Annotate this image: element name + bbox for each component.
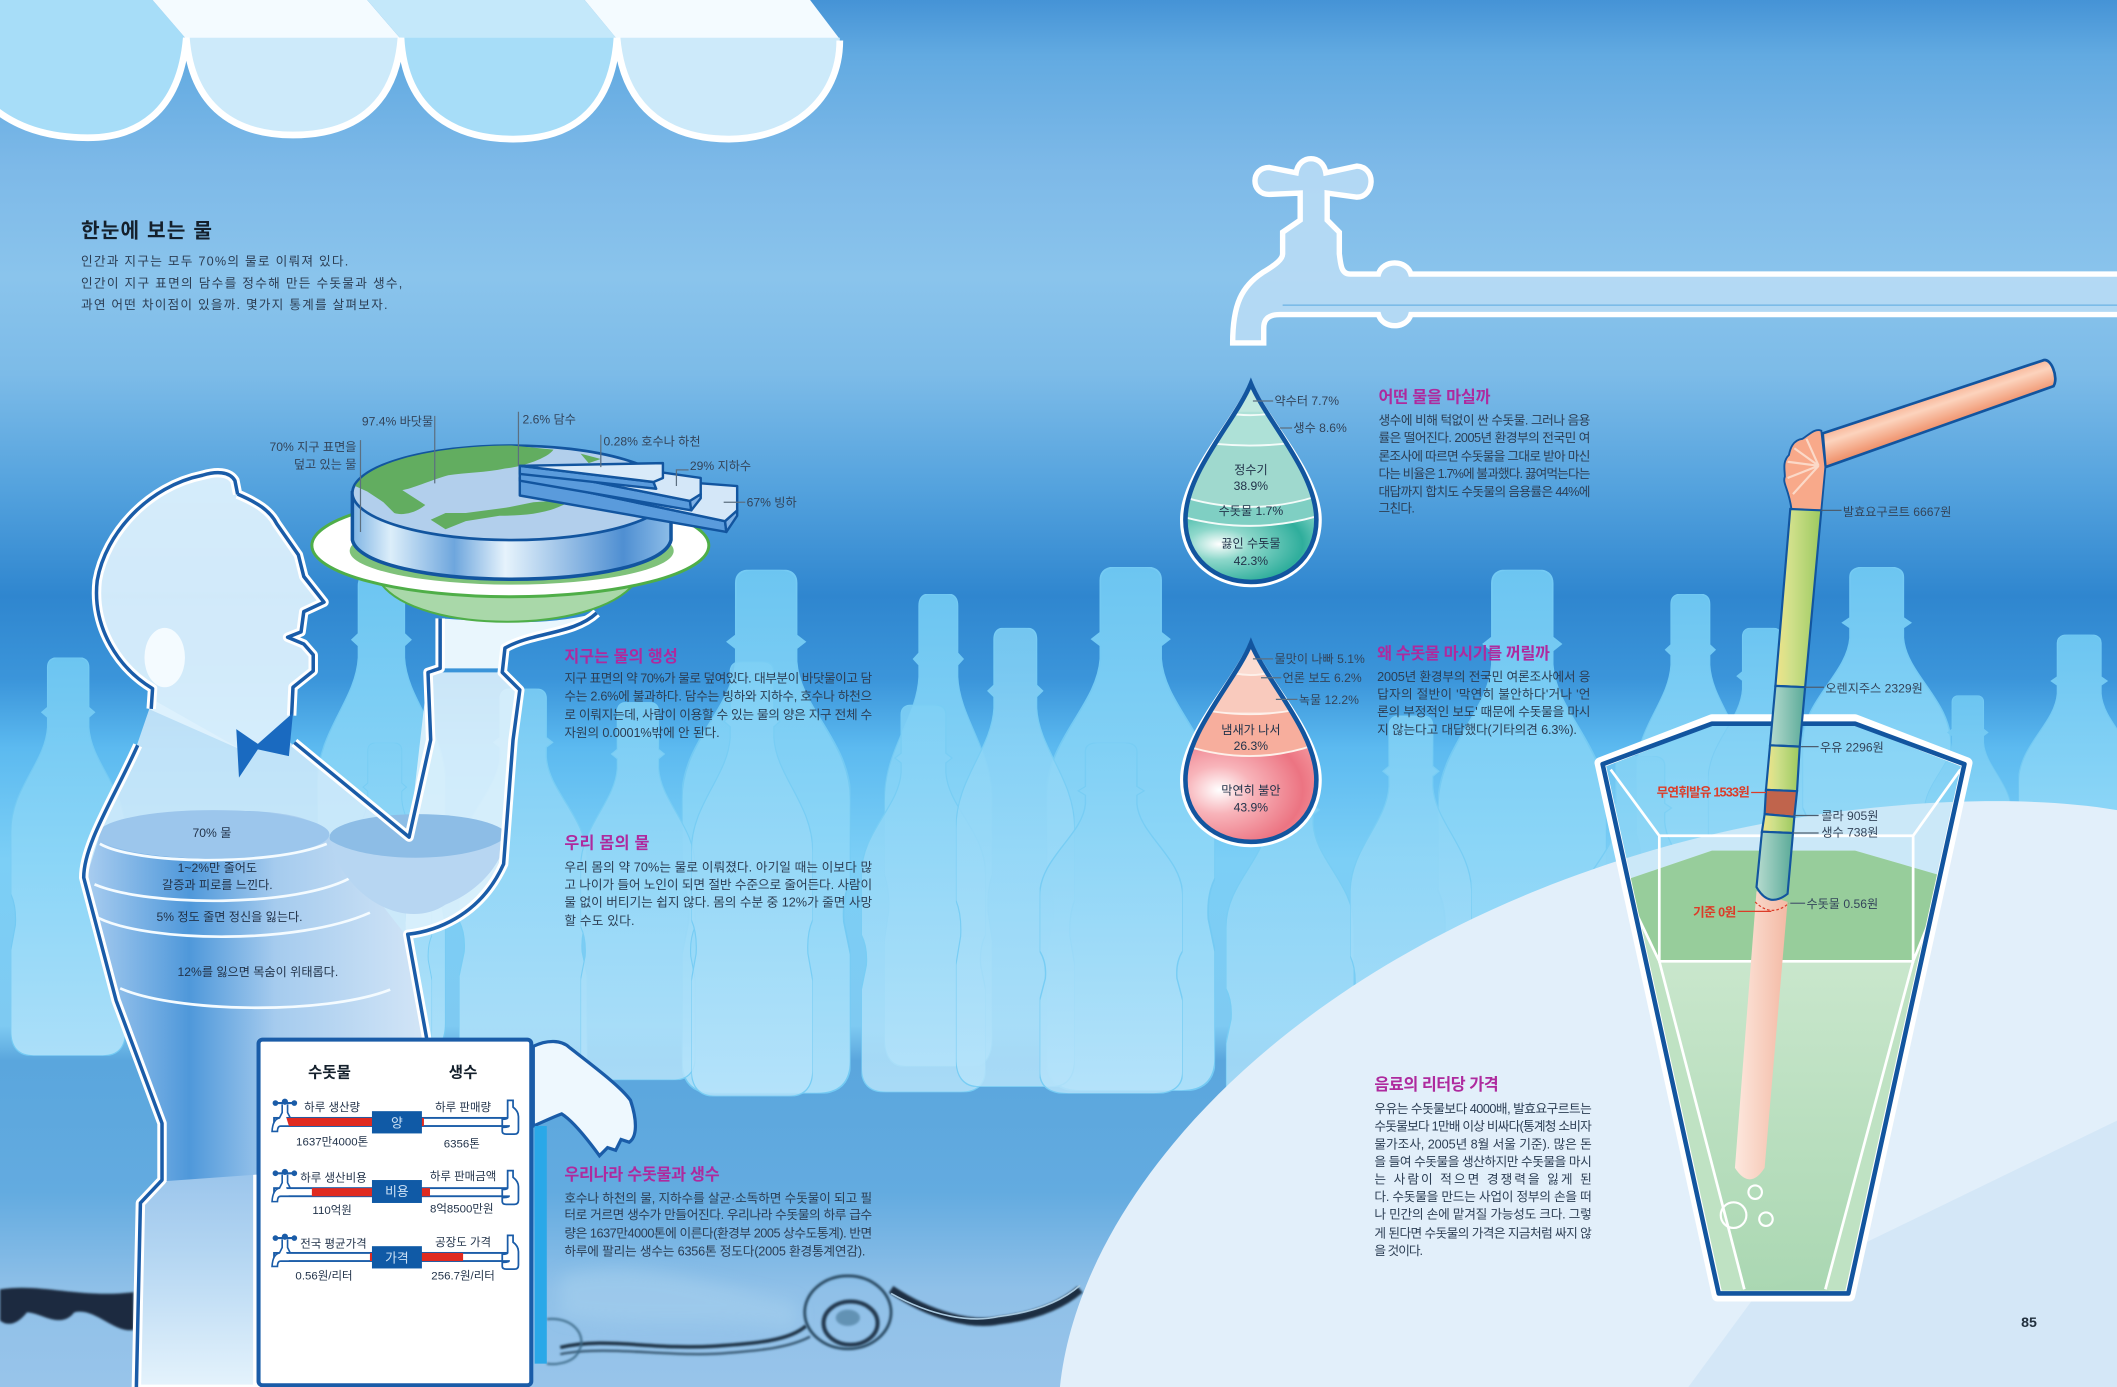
pie labels: 97.4% 바닷물 <box>362 414 433 428</box>
title block: 과연 어떤 차이점이 있을까. 몇가지 통계를 살펴보자. <box>81 298 387 312</box>
text: water in our body: 할 수도 있다. <box>564 914 635 928</box>
world map land <box>355 446 601 529</box>
straw price labels: 기준 0원 <box>1693 906 1736 920</box>
text: which water to drink: 률은 떨어진다. 2005년 환경부의 전국민 여 <box>1378 431 1590 445</box>
text: which water to drink: 어떤 물을 마실까 <box>1378 388 1491 406</box>
row: cost: 110억원 <box>312 1203 352 1217</box>
text: planet of water <box>564 647 872 740</box>
man: raised hand <box>440 613 597 668</box>
drop labels: 수돗물 1.7% <box>1219 504 1283 518</box>
title block <box>81 220 402 312</box>
text: price per liter: 을 들여 수돗물을 생산하지만 수돗물을 마시 <box>1374 1155 1592 1169</box>
drop leaders <box>1253 401 1292 428</box>
pie cylinder side <box>352 493 671 579</box>
text: which water to drink <box>1378 388 1591 515</box>
man: ear <box>144 628 185 687</box>
drop outline <box>1180 378 1322 587</box>
drop outline <box>1180 638 1322 847</box>
text: why avoid tap water: 답자의 절반이 '막연히 불안하다'거나 '언 <box>1377 688 1590 702</box>
big faucet with pipe <box>1233 159 2117 343</box>
drop chart: what water people drink <box>1175 378 1347 589</box>
drop border <box>1185 383 1316 582</box>
row: quantity: 1637만4000톤 <box>296 1136 368 1149</box>
text: planet of water: 지구는 물의 행성 <box>564 647 678 666</box>
straw price labels: 수돗물 0.56원 <box>1806 897 1878 911</box>
drop border <box>1185 643 1316 842</box>
row: cost: 8억8500만원 <box>430 1201 494 1215</box>
text: why avoid tap water: 지 않는다고 대답했다(기타의견 6.3%). <box>1377 722 1577 737</box>
panel column headers: 수돗물 <box>308 1063 351 1081</box>
text: why avoid tap water: 왜 수돗물 마시기를 꺼릴까 <box>1377 645 1550 663</box>
text: tap water and bottled water: 호수나 하천의 물, 지하수를 살균·소독하면 수돗물이 되고 필 <box>564 1191 872 1205</box>
row: quantity: 하루 생산량 <box>304 1100 361 1114</box>
row: price: 256.7원/리터 <box>431 1268 495 1282</box>
straw price labels: 우유 2296원 <box>1820 740 1884 754</box>
man: legs <box>136 1123 257 1387</box>
text: price per liter: 게 된다면 수돗물의 가격은 지금처럼 싸지 않 <box>1374 1226 1592 1240</box>
drop leaders <box>1253 659 1297 699</box>
pie labels: 0.28% 호수나 하천 <box>604 434 701 449</box>
man: lower hand <box>533 1041 635 1156</box>
liquid body <box>1632 851 1935 1291</box>
pie labels: 67% 빙하 <box>747 495 797 509</box>
man: body water labels: 갈증과 피로를 느낀다. <box>162 878 273 892</box>
drop labels: 막연히 불안 <box>1221 784 1281 798</box>
man: body water labels: 70% 물 <box>193 826 231 840</box>
straw bend ruffle <box>1784 430 1825 510</box>
text: price per liter: 수돗물보다 1만배 이상 비싸다(통계청 소비자 <box>1374 1120 1592 1134</box>
row: price: 0.56원/리터 <box>295 1268 353 1282</box>
text: water in our body: 우리 몸의 약 70%는 물로 이뤄졌다. 아기일 때는 이보다 많 <box>564 861 872 875</box>
man: body water labels: 5% 정도 줄면 정신을 잃는다. <box>156 910 303 924</box>
liquid lower darker facet <box>1642 928 1743 1291</box>
text: price per liter: 물가조사, 2005년 8월 서울 기준). 많은 돈 <box>1374 1137 1592 1151</box>
drop labels: 정수기 <box>1234 463 1268 477</box>
row: cost: 하루 판매금액 <box>430 1169 496 1183</box>
drop labels <box>1219 393 1347 568</box>
row: price: 공장도 가격 <box>435 1235 491 1249</box>
page number: 85 <box>2021 1315 2037 1331</box>
plate rim <box>312 494 709 597</box>
text: price per liter: 는 사람이 적으면 경쟁력을 잃게 된 <box>1374 1172 1592 1186</box>
drop labels: 끓인 수돗물 <box>1221 536 1281 550</box>
man: jacket torso <box>84 699 429 1181</box>
text: price per liter: 다. 수돗물을 만드는 사업이 정부의 손을 떠 <box>1374 1190 1592 1204</box>
awning top stripes <box>0 0 840 39</box>
straw orange arm <box>1823 360 2055 467</box>
text: which water to drink: 론조사에 따르면 수돗물을 그대로 받아 마신 <box>1378 449 1590 463</box>
text: planet of water: 로 이뤄지는데, 사람이 이용할 수 있는 물의 양은 지구 전체 수 <box>564 708 872 722</box>
glass interior tint <box>1600 720 1967 1296</box>
row: quantity: 6356톤 <box>444 1138 480 1151</box>
pie labels: 29% 지하수 <box>690 459 751 473</box>
row: cost: 하루 생산비용 <box>300 1170 367 1184</box>
pie labels: 2.6% 담수 <box>522 412 576 426</box>
pie top ocean <box>352 446 671 540</box>
row: price <box>272 1234 518 1282</box>
pie labels <box>270 412 797 509</box>
text: tap water and bottled water: 량은 1637만4000톤에 이른다(환경부 2005 상수도통계). 반면 <box>564 1226 872 1240</box>
straw price labels: 오렌지주스 2329원 <box>1825 682 1923 696</box>
drop labels <box>1221 652 1365 814</box>
text: tap water and bottled water: 우리나라 수돗물과 생수 <box>564 1166 720 1184</box>
glass outer outline <box>1600 720 1967 1296</box>
plate under-bowl <box>381 583 635 622</box>
text: tap water and bottled water: 터로 거르면 생수가 만들어진다. 우리나라 수돗물의 하루 급수 <box>564 1208 872 1222</box>
row: quantity <box>272 1099 518 1151</box>
wedge: lakes and rivers 0.28% <box>520 463 663 489</box>
plate and pie chart <box>270 412 797 622</box>
glass inner facets <box>1611 770 1960 1289</box>
panel column headers: 생수 <box>449 1063 477 1081</box>
drop labels: 녹물 12.2% <box>1299 693 1359 707</box>
drop bands <box>1188 649 1314 840</box>
bubbles <box>1721 1185 1773 1228</box>
drop labels: 43.9% <box>1234 800 1268 814</box>
straw price segments <box>1757 509 1821 900</box>
water surface waves and ripple <box>0 1269 1080 1364</box>
panel column headers <box>308 1063 477 1081</box>
straw price labels <box>1657 505 1952 920</box>
bright vertical water strip <box>535 1126 547 1364</box>
man: raised sleeve and arm bowl <box>405 672 520 934</box>
text: why avoid tap water <box>1377 645 1590 737</box>
text: planet of water: 지구 표면의 약 70%가 물로 덮여있다. 대부분이 바닷물이고 담 <box>564 671 872 685</box>
pie labels: 70% 지구 표면을 <box>270 440 356 454</box>
man: bow tie <box>236 713 293 778</box>
row: cost <box>272 1169 518 1217</box>
drop labels: 냄새가 나서 <box>1221 723 1281 737</box>
bottle silhouettes front row <box>338 628 1708 1148</box>
text: why avoid tap water: 2005년 환경부의 전국민 여론조사에서 응 <box>1377 670 1590 684</box>
title block: 인간이 지구 표면의 담수를 정수해 만든 수돗물과 생수, <box>81 277 402 291</box>
drop labels: 42.3% <box>1234 554 1268 568</box>
drop labels: 언론 보도 6.2% <box>1283 671 1362 685</box>
straw price labels: 생수 738원 <box>1821 825 1878 839</box>
man: body water labels: 1~2%만 줄어도 <box>178 861 257 875</box>
text: water in our body: 고 나이가 들어 노인이 되면 절반 수준으로 줄어든다. 사람이 <box>564 878 872 892</box>
straw price labels: 발효요구르트 6667원 <box>1843 505 1952 519</box>
liquid surface <box>1630 850 1937 960</box>
text: price per liter: 을 것이다. <box>1374 1244 1423 1258</box>
text: water in our body: 우리 몸의 물 <box>564 835 650 853</box>
man: body water labels <box>156 826 338 979</box>
wedge: groundwater 29% <box>520 467 701 510</box>
pie labels: 덮고 있는 물 <box>294 457 356 471</box>
pie wedges <box>520 463 737 532</box>
row: cost: 비용 <box>385 1184 409 1199</box>
drop bands <box>1188 389 1314 580</box>
text: why avoid tap water: 론의 부정적인 보도' 때문에 수돗물을 마시 <box>1377 705 1590 719</box>
glass with liquid <box>1593 720 1971 1296</box>
straw price labels: 콜라 905원 <box>1821 809 1878 823</box>
text: tap water and bottled water: 하루에 팔리는 생수는 6356톤 정도다(2005 환경통계연감). <box>564 1245 865 1259</box>
awning <box>0 0 840 139</box>
comparison panel: tap vs bottled <box>259 1040 531 1385</box>
pie leader lines <box>360 412 745 532</box>
pale table curve at lower right <box>1060 801 2117 1387</box>
wedge: glaciers 67% <box>520 478 737 532</box>
bottle silhouettes back row <box>11 567 2117 1110</box>
row: quantity: 양 <box>391 1115 403 1130</box>
liquid clipped to glass <box>1630 850 1937 1291</box>
drop chart: why avoid tap water <box>1175 638 1365 849</box>
man: water surface ellipse and level lines <box>95 810 390 1008</box>
straw leader lines <box>1738 510 1842 911</box>
text: planet of water: 수는 2.6%에 불과하다. 담수는 빙하와 지하수, 호수나 하천으 <box>564 690 872 704</box>
text: water in our body: 물 없이 버티기는 쉽지 않다. 몸의 수분 중 12%가 줄면 사망 <box>564 896 872 910</box>
drop labels: 생수 8.6% <box>1293 421 1347 435</box>
man: head <box>97 473 324 751</box>
man: waiter figure <box>84 473 635 1387</box>
drop labels: 38.9% <box>1234 479 1268 493</box>
text: which water to drink: 다는 비율은 1.7%에 불과했다. 끓여먹는다는 <box>1378 466 1591 481</box>
man: body water level <box>86 811 429 1181</box>
man: body water labels: 12%를 잃으면 목숨이 위태롭다. <box>178 965 338 979</box>
text: which water to drink: 대답까지 합치도 수돗물의 음용률은 44%에 <box>1378 485 1590 499</box>
text: planet of water: 자원의 0.0001%밖에 안 된다. <box>564 726 720 740</box>
plate inner green ring <box>350 517 674 585</box>
title block: 인간과 지구는 모두 70%의 물로 이뤄져 있다. <box>81 254 348 268</box>
text: tap water and bottled water <box>564 1166 872 1259</box>
straw lower pink section <box>1735 891 1788 1179</box>
text: price per liter <box>1374 1076 1592 1258</box>
row: price: 전국 평균가격 <box>300 1237 367 1251</box>
text: which water to drink: 생수에 비해 턱없이 싼 수돗물. 그러나 음용 <box>1378 414 1590 428</box>
text: water in our body <box>564 835 872 928</box>
title block: 한눈에 보는 물 <box>81 220 212 243</box>
row: price: 가격 <box>385 1250 409 1265</box>
text: price per liter: 음료의 리터당 가격 <box>1374 1076 1499 1094</box>
drop labels: 약수터 7.7% <box>1275 393 1339 408</box>
glass shadow on table <box>1688 1121 2117 1387</box>
text: which water to drink: 그친다. <box>1378 501 1415 515</box>
row: quantity: 하루 판매량 <box>435 1100 492 1114</box>
straw price labels: 무연휘발유 1533원 <box>1657 786 1750 800</box>
awning scallops <box>0 38 840 139</box>
man: outlines <box>84 473 597 1387</box>
drop labels: 26.3% <box>1234 739 1268 753</box>
drop labels: 물맛이 나빠 5.1% <box>1275 652 1365 666</box>
text: price per liter: 나 민간의 손에 맡겨질 가능성도 크다. 그렇 <box>1374 1208 1592 1222</box>
price straw <box>1657 360 2055 1179</box>
text: price per liter: 우유는 수돗물보다 4000배, 발효요구르트는 <box>1374 1102 1592 1116</box>
panel box <box>259 1040 531 1385</box>
